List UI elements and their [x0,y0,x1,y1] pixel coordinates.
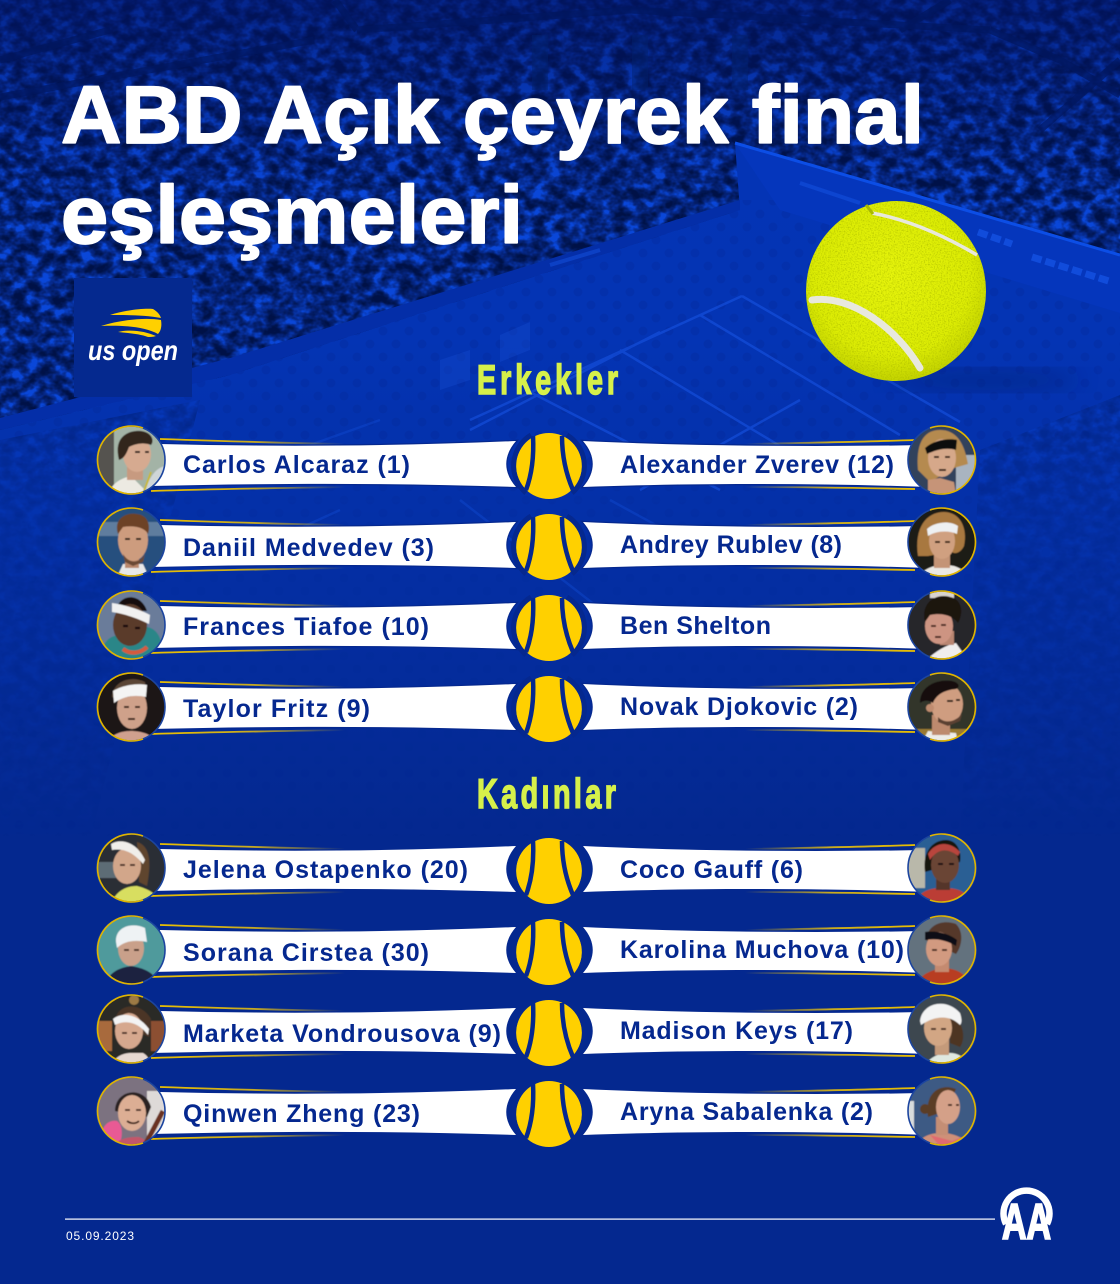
match: Ostapenko vs Gauff [96,833,977,904]
name: Alexander Zverev: Alexander Zverev (12) [620,451,894,479]
portrait: Daniil Medvedev [96,507,166,577]
logo: US Open: us open [88,335,178,366]
portrait: Andrey Rublev [907,507,977,577]
portrait: Jelena Ostapenko [96,833,166,903]
portrait: Karolina Muchova [907,915,977,985]
match: Cirstea vs Muchova [96,915,977,985]
name: Karolina Muchova: Karolina Muchova (10) [620,936,904,964]
name: Ben Shelton: Ben Shelton [620,612,771,640]
heading: Erkekler: Erkekler [477,356,618,403]
name: Novak Djokovic: Novak Djokovic (2) [620,693,858,721]
portrait: Sorana Cirstea [96,915,166,985]
name: Sorana Cirstea: Sorana Cirstea (30) [183,939,429,967]
portrait: Novak Djokovic [907,672,977,743]
name: Qinwen Zheng: Qinwen Zheng (23) [183,1100,420,1128]
portrait: Aryna Sabalenka [907,1076,977,1146]
name: Daniil Medvedev: Daniil Medvedev (3) [183,534,434,562]
name: Madison Keys: Madison Keys (17) [620,1017,853,1045]
name: Carlos Alcaraz: Carlos Alcaraz (1) [183,451,410,479]
match: Medvedev vs Rublev [96,507,977,580]
match: Fritz vs Djokovic [96,672,977,743]
heading: Kadınlar: Kadınlar [477,770,616,817]
match: Vondrousova vs Keys [96,994,977,1066]
date: 05.09.2023 [66,1229,134,1243]
logo: Anadolu Agency: AA [1002,1194,1051,1250]
portrait: Alexander Zverev [907,425,977,495]
name: Jelena Ostapenko: Jelena Ostapenko (20) [183,856,468,884]
portrait: Madison Keys [907,994,977,1064]
title: ABD Açık çeyrek final [61,70,924,161]
name: Marketa Vondrousova: Marketa Vondrousova (9) [183,1020,501,1048]
icon: tennis ball [806,201,1080,391]
portrait: Qinwen Zheng [96,1076,166,1146]
name: Aryna Sabalenka: Aryna Sabalenka (2) [620,1098,873,1126]
logo: US Open [74,278,192,397]
name: Frances Tiafoe: Frances Tiafoe (10) [183,613,429,641]
match: Tiafoe vs Shelton [96,590,977,661]
name: Andrey Rublev: Andrey Rublev (8) [620,531,842,559]
portrait: Coco Gauff [907,833,977,903]
portrait: Ben Shelton [907,590,977,660]
footer rule [65,1218,995,1220]
name: Taylor Fritz: Taylor Fritz (9) [183,695,370,723]
portrait: Taylor Fritz [96,672,166,742]
title [61,70,924,261]
name: Coco Gauff: Coco Gauff (6) [620,856,803,884]
portrait: Marketa Vondrousova [96,994,166,1064]
match: Zheng vs Sabalenka [96,1076,977,1147]
title: eşleşmeleri [61,170,523,261]
portrait: Frances Tiafoe [96,590,166,660]
background: stadium photo in blue [0,0,1120,774]
match: Alcaraz vs Zverev [96,425,977,499]
portrait: Carlos Alcaraz [96,425,166,495]
logo: Anadolu Agency [1002,1191,1051,1250]
